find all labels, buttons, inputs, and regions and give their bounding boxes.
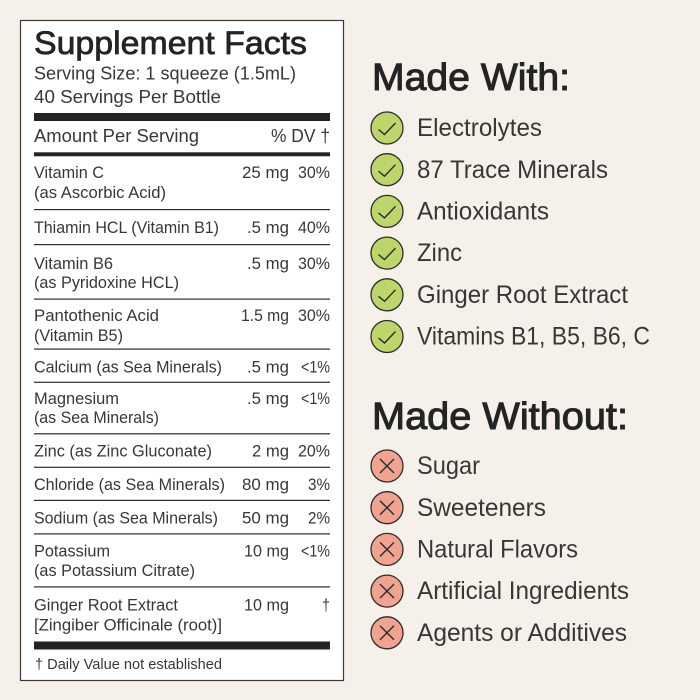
table header: Amount Per Serving <box>34 126 199 146</box>
row: calcium: Calcium (as Sea Minerals) <box>34 358 222 377</box>
item: zinc <box>371 237 462 269</box>
row: pantothenic acid <box>34 306 330 345</box>
row: zinc: 2 mg <box>252 442 289 460</box>
row: zinc: 20% <box>298 442 330 460</box>
row: vitamin c: 25 mg <box>242 163 289 182</box>
table header <box>34 126 330 146</box>
serving info <box>34 64 296 107</box>
row: pantothenic acid: (Vitamin B5) <box>34 326 123 345</box>
item: vitamins <box>371 320 650 352</box>
row: magnesium <box>34 389 330 427</box>
row: ginger root extract: 10 mg <box>244 596 289 614</box>
row: vitamin b6: .5 mg <box>247 254 289 273</box>
item: antioxidants: Antioxidants <box>417 198 549 226</box>
row: vitamin b6: (as Pyridoxine HCL) <box>34 273 179 292</box>
row: magnesium: Magnesium <box>34 389 119 408</box>
item: sweeteners <box>371 492 546 524</box>
serving info: Serving Size: 1 squeeze (1.5mL) <box>34 64 296 84</box>
row: vitamin c: (as Ascorbic Acid) <box>34 183 166 202</box>
row: magnesium: .5 mg <box>247 389 289 408</box>
row: vitamin b6 <box>34 254 330 292</box>
row: zinc: Zinc (as Zinc Gluconate) <box>34 442 212 460</box>
serving info: 40 Servings Per Bottle <box>34 87 221 107</box>
row: potassium: (as Potassium Citrate) <box>34 561 195 580</box>
item: 87 trace minerals: 87 Trace Minerals <box>417 156 608 184</box>
row: vitamin b6: Vitamin B6 <box>34 254 113 273</box>
row: vitamin c: Vitamin C <box>34 163 104 182</box>
row: chloride: 3% <box>308 475 330 494</box>
item: electrolytes: Electrolytes <box>417 114 542 142</box>
row: calcium: .5 mg <box>247 358 289 377</box>
row: ginger root extract: † <box>322 596 330 614</box>
heading: made with: Made With: <box>372 57 570 99</box>
item: zinc: Zinc <box>417 239 462 267</box>
row: sodium: Sodium (as Sea Minerals) <box>34 508 218 528</box>
list: made with <box>371 112 650 352</box>
row: thiamin: Thiamin HCL (Vitamin B1) <box>34 218 219 237</box>
item: sugar <box>371 450 480 482</box>
item: sweeteners: Sweeteners <box>417 494 546 522</box>
item: ginger root extract <box>371 279 628 311</box>
row: pantothenic acid: 30% <box>298 306 330 325</box>
row: zinc <box>34 442 330 460</box>
table header: % DV † <box>271 126 330 146</box>
row: sodium: 2% <box>308 508 330 528</box>
row: thiamin <box>34 218 330 237</box>
row: vitamin c <box>34 163 330 202</box>
row: potassium <box>34 542 330 580</box>
row: thiamin: .5 mg <box>247 218 289 237</box>
row: potassium: Potassium <box>34 542 110 560</box>
row: potassium: 10 mg <box>244 542 289 560</box>
heading: supplement facts: Supplement Facts <box>34 25 307 61</box>
item: 87 trace minerals <box>371 154 608 186</box>
item: agents or additives: Agents or Additives <box>417 619 627 647</box>
row: sodium: 50 mg <box>242 508 289 528</box>
row: magnesium: (as Sea Minerals) <box>34 408 159 427</box>
row: ginger root extract: Ginger Root Extract <box>34 596 178 614</box>
item: ginger root extract: Ginger Root Extract <box>417 281 628 309</box>
item: natural flavors <box>371 533 578 565</box>
item: artificial ingredients: Artificial Ingredients <box>417 577 629 605</box>
row: ginger root extract: [Zingiber Officinale (root)] <box>34 616 222 634</box>
row: ginger root extract <box>34 596 330 634</box>
list: made without <box>371 450 629 649</box>
item: antioxidants <box>371 195 549 227</box>
row: vitamin c: 30% <box>298 163 330 182</box>
item: vitamins: Vitamins B1, B5, B6, C <box>417 322 650 350</box>
item: electrolytes <box>371 112 542 144</box>
row: pantothenic acid: Pantothenic Acid <box>34 306 159 325</box>
row: chloride: Chloride (as Sea Minerals) <box>34 475 225 494</box>
row: potassium: <1% <box>301 542 330 560</box>
panel: supplement facts <box>20 20 344 680</box>
row: magnesium: <1% <box>301 389 330 408</box>
item: natural flavors: Natural Flavors <box>417 536 578 564</box>
row: sodium <box>34 508 330 528</box>
footnote: † Daily Value not established <box>35 657 222 673</box>
row: chloride: 80 mg <box>242 475 289 494</box>
heading: made without: Made Without: <box>372 396 628 438</box>
row: thiamin: 40% <box>298 218 330 237</box>
row: calcium <box>34 358 330 377</box>
row: pantothenic acid: 1.5 mg <box>241 306 289 325</box>
row: calcium: <1% <box>301 358 330 377</box>
row: vitamin b6: 30% <box>298 254 330 273</box>
item: sugar: Sugar <box>417 452 480 480</box>
row: chloride <box>34 475 330 494</box>
